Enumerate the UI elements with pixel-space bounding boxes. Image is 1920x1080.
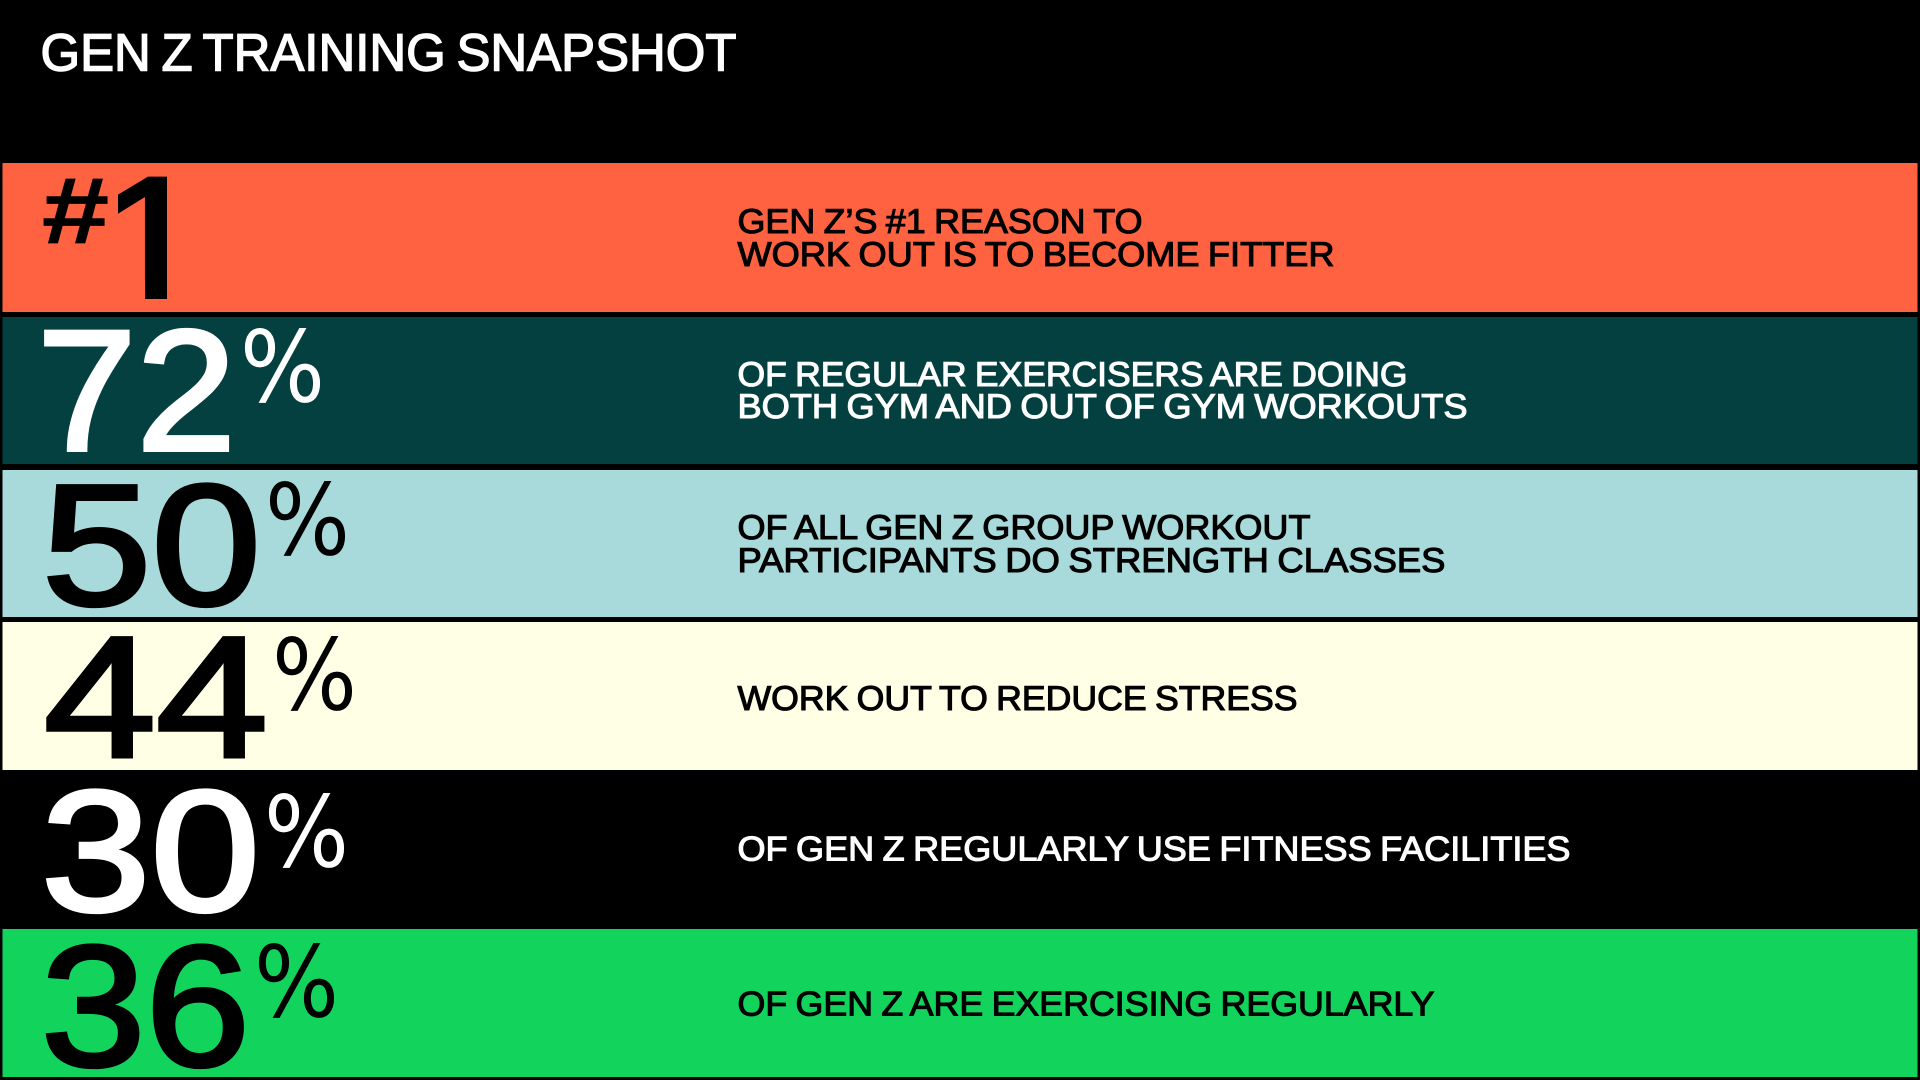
stat: 72% [37, 295, 325, 487]
line 1: OF ALL GEN Z GROUP WORKOUT [738, 509, 1310, 547]
percent sign: % [264, 776, 349, 891]
stat digit one: 1 [98, 142, 208, 334]
band: black [2, 775, 1918, 924]
percent sign: % [254, 926, 339, 1041]
title: GEN Z TRAINING SNAPSHOT [40, 24, 736, 82]
panel: 72 percent [2, 295, 1918, 487]
description: OF GEN Z REGULARLY USE FITNESS FACILITIES [738, 830, 1570, 868]
stat number: 30 [41, 756, 260, 948]
band: light blue [2, 470, 1918, 617]
description: OF GEN Z ARE EXERCISING REGULARLY [738, 986, 1434, 1024]
stat number: 72 [37, 295, 236, 487]
band: cream [2, 622, 1918, 770]
stat digit one stem [145, 200, 167, 299]
stat hash: # [42, 158, 109, 263]
band: dark teal [2, 317, 1918, 464]
line 1: OF REGULAR EXERCISERS ARE DOING [738, 356, 1408, 394]
band: green [2, 929, 1918, 1077]
stat number: 50 [42, 450, 261, 642]
band: orange [2, 163, 1918, 312]
stat: 30% [41, 756, 349, 948]
panel: number one reason [2, 163, 1918, 312]
stat: #1 [44, 176, 167, 299]
percent sign: % [265, 464, 350, 579]
panel: 36 percent [2, 910, 1918, 1080]
description [738, 203, 1334, 274]
stat: 36% [41, 910, 339, 1080]
percent sign: % [240, 311, 325, 426]
description: WORK OUT TO REDUCE STRESS [738, 680, 1298, 718]
stat number: 44 [44, 602, 268, 794]
panel: 50 percent [2, 450, 1918, 642]
line 1: GEN Z’S #1 REASON TO [738, 203, 1142, 241]
description [738, 356, 1468, 426]
line 2: BOTH GYM AND OUT OF GYM WORKOUTS [738, 388, 1468, 426]
panel: 44 percent [2, 602, 1918, 794]
stat: 44% [44, 602, 357, 794]
line 2: WORK OUT IS TO BECOME FITTER [738, 236, 1334, 274]
percent sign: % [272, 619, 357, 734]
panel: 30 percent [2, 756, 1918, 948]
stat: 50% [42, 450, 350, 642]
description [738, 509, 1446, 580]
line 2: PARTICIPANTS DO STRENGTH CLASSES [738, 542, 1446, 580]
